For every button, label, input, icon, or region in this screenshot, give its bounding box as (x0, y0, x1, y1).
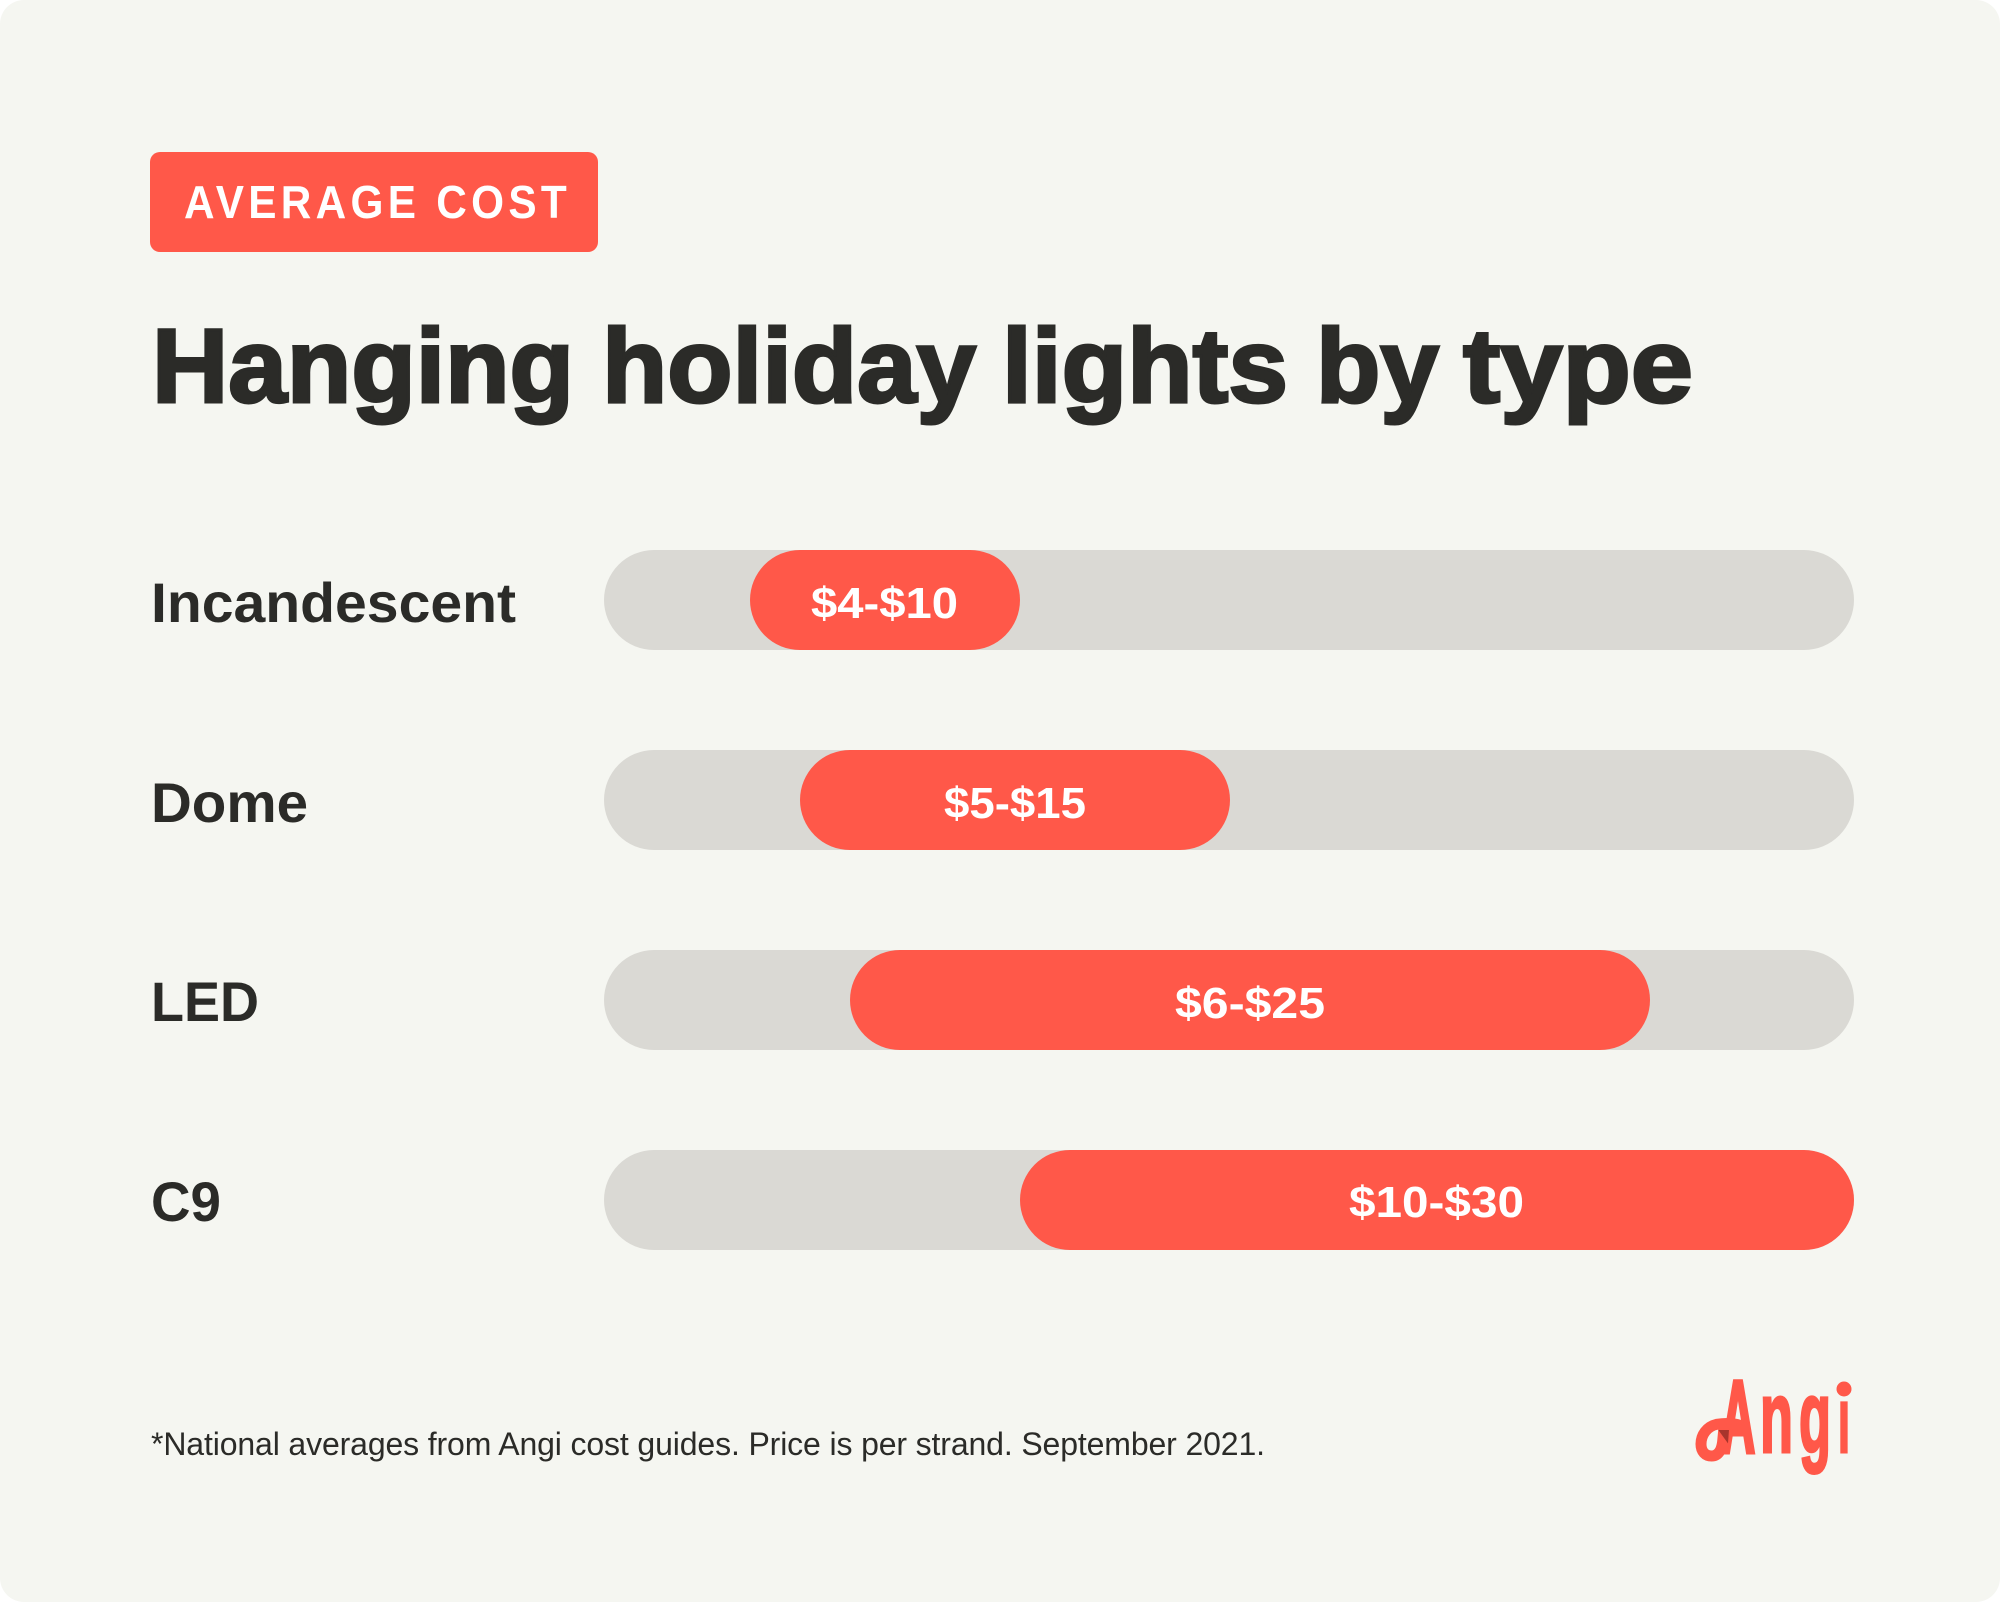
track: Dome (604, 750, 1854, 850)
badge: average cost (150, 152, 598, 252)
row: Dome (151, 750, 1854, 850)
label: Incandescent: Incandescent (151, 571, 516, 634)
title (152, 308, 1693, 425)
range bar: $5-$15 (800, 750, 1230, 850)
track: LED (604, 950, 1854, 1050)
value: $5-$15: $5-$15 (944, 779, 1086, 828)
title: Hanging (152, 308, 574, 425)
value: $4-$10: $4-$10 (811, 579, 958, 628)
value: $6-$25: $6-$25 (1175, 979, 1325, 1028)
value: $10-$30: $10-$30 (1349, 1178, 1524, 1227)
logo: Angi: n (1760, 1360, 1793, 1474)
track: C9 (604, 1150, 1854, 1250)
range bar: $10-$30 (1020, 1150, 1854, 1250)
label: Dome: Dome (151, 771, 308, 834)
title: holiday (602, 308, 976, 425)
logo: Angi (1701, 1360, 1852, 1474)
track: Incandescent (604, 550, 1854, 650)
label: C9: C9 (151, 1170, 221, 1233)
footnote: *National averages from Angi cost guides. Price is per strand. September 2021. (151, 1426, 1265, 1462)
row: LED (151, 950, 1854, 1050)
title: lights (1002, 308, 1288, 425)
logo: Angi: A (1721, 1360, 1755, 1474)
logo: Angi: i (1838, 1368, 1850, 1472)
range bar: $6-$25 (850, 950, 1650, 1050)
badge: average cost: AVERAGE COST (184, 177, 567, 228)
logo: Angi: g (1799, 1360, 1831, 1474)
title: by (1316, 308, 1439, 425)
range bar: $4-$10 (750, 550, 1020, 650)
row: C9 (151, 1150, 1854, 1250)
label: LED: LED (151, 970, 259, 1033)
row: Incandescent (151, 550, 1854, 650)
title: type (1463, 308, 1693, 425)
